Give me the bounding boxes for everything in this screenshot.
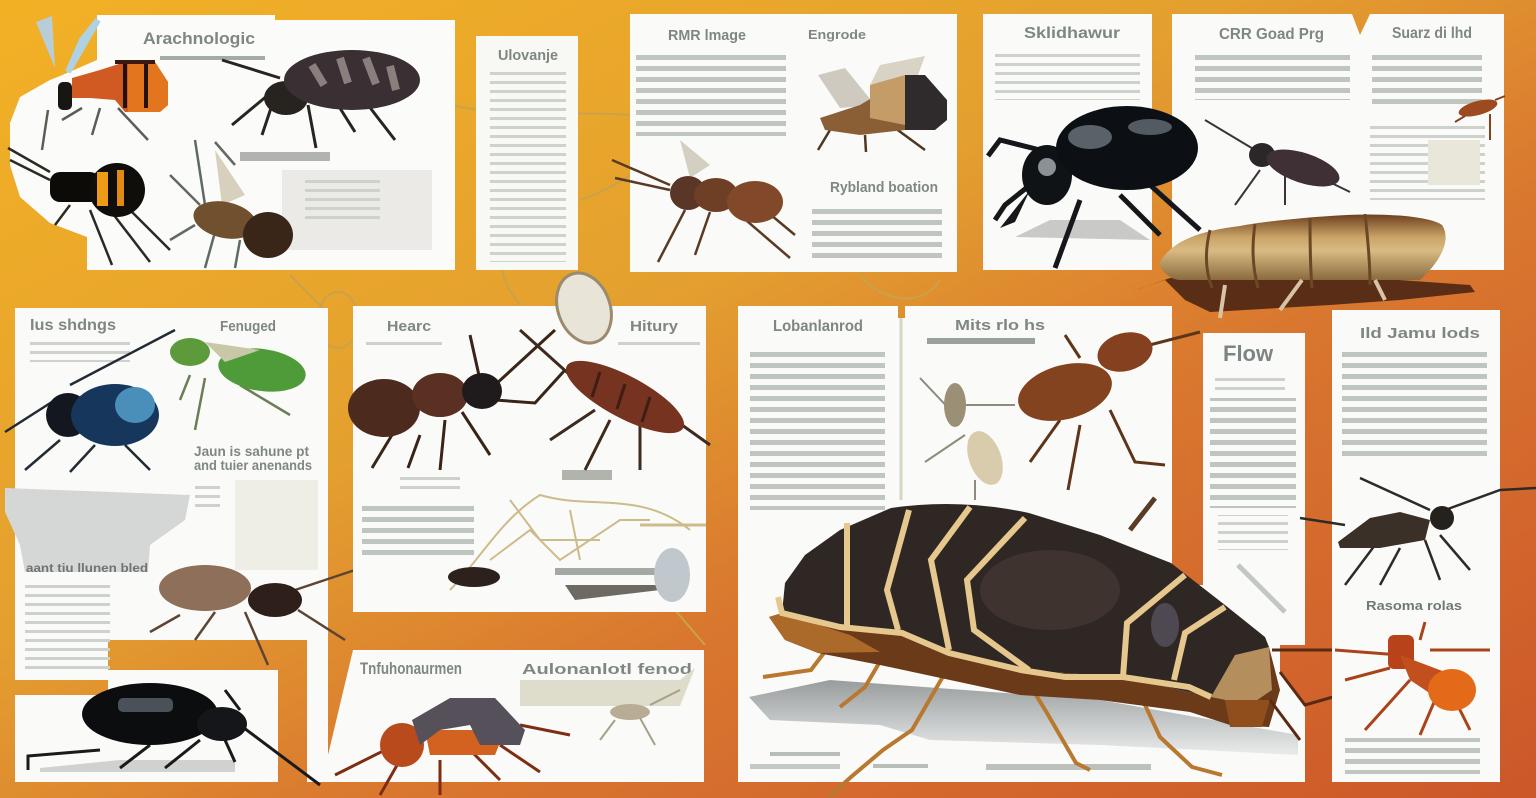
heading: Engrode [808,27,866,42]
icon: orange ant [1335,622,1490,735]
icon: magnifier [547,265,621,351]
icon: pale winged insect [600,690,680,745]
box: pale label [235,480,318,570]
panel: right column [1300,310,1536,782]
heading: Ulovanje [498,47,558,64]
panel: top centre [612,14,957,272]
icon: yellow black wasp [8,148,170,265]
icon: brown ant left [348,330,565,470]
icon: small orange insect [1455,96,1505,140]
panel: beetle text panel [983,14,1152,270]
icon: black ant top [222,50,420,148]
text block [195,480,220,510]
text block [1215,372,1285,392]
panel: bottom left [15,670,320,785]
panel: Flow column [1203,333,1305,645]
box: caption strip [520,668,695,706]
heading: Mits rlo hs [955,317,1045,334]
icon: red-brown ant [520,330,710,470]
heading: Arachnologic [143,29,255,48]
text block [1342,350,1487,462]
heading: Hearc [387,318,431,335]
heading: and tuier anenands [194,457,312,473]
text block [618,340,700,348]
connector lines [290,100,940,645]
text block [362,500,474,560]
text block: specimen notes [160,56,432,250]
text block [1372,50,1482,105]
text block [1370,125,1485,200]
heading: Hitury [630,318,679,335]
heading: Sklidhawur [1024,25,1120,42]
text block [366,340,442,350]
icon: black beetle [28,683,320,785]
icon: winged bee [818,56,947,152]
icon: dark small insect leg [1130,498,1155,530]
shadow strip [40,760,235,772]
icon: brown larva [1130,214,1475,318]
shadow under beetle [749,680,1298,755]
panel: top right [1172,14,1505,270]
text block [30,338,130,362]
heading: Ild Jamu lods [1360,325,1480,342]
heading: Fenuged [220,318,276,335]
heading: Flow [1223,341,1274,366]
box: white shelf [5,488,190,572]
icon: giant striped beetle [763,504,1340,797]
icon: green beetle [170,338,308,430]
heading: Lobanlanrod [773,318,863,335]
panel: narrow top column [476,36,578,270]
text block [1210,398,1296,508]
text block [25,582,110,672]
text block [1195,50,1350,100]
panel: large lower centre [738,306,1340,797]
text block [750,350,885,510]
icon: dark ant [1300,478,1536,585]
heading: Tnfuhonaurmen [360,659,462,678]
heading: Suarz di lhd [1392,25,1472,42]
arrow: diagonal note [1238,565,1285,612]
icon: blue beetle [5,330,175,472]
icon: grey pin [555,548,690,602]
divider line [900,318,902,500]
icon: orange winged wasp [36,16,168,150]
text block [1345,738,1480,774]
icon: pale fly [920,378,1015,500]
panel: mid left [5,308,370,782]
illustration: branching roots [450,495,706,590]
icon: small dark insect [1205,120,1350,205]
heading: Jaun is sahune pt [194,443,309,459]
heading: Ius shdngs [30,317,116,334]
text block [750,752,1151,770]
text block [490,72,566,262]
panel: bottom centre [328,650,704,795]
icon: brown termite [1012,326,1200,490]
icon: brown winged ant [170,140,293,268]
icon: tan beetle [150,565,370,665]
text block [1218,515,1288,550]
icon: small dark bug [448,567,500,587]
heading: aant tiu llunen bled [26,561,148,575]
text block [995,50,1140,100]
heading: Rasoma rolas [1366,598,1462,613]
heading: Rybland boation [830,179,938,196]
icon: brown ant [612,140,795,262]
icon: orange black beetle [335,698,570,795]
text block [812,204,942,264]
heading: CRR Goad Prg [1219,26,1324,43]
icon: large black beetle [988,106,1200,268]
text block [636,50,786,136]
panel: top left specimens [8,15,455,270]
panel: centre middle [348,265,710,612]
text block [927,338,1035,344]
heading: RMR lmage [668,27,746,44]
heading: Aulonanlotl fenod [522,661,692,678]
